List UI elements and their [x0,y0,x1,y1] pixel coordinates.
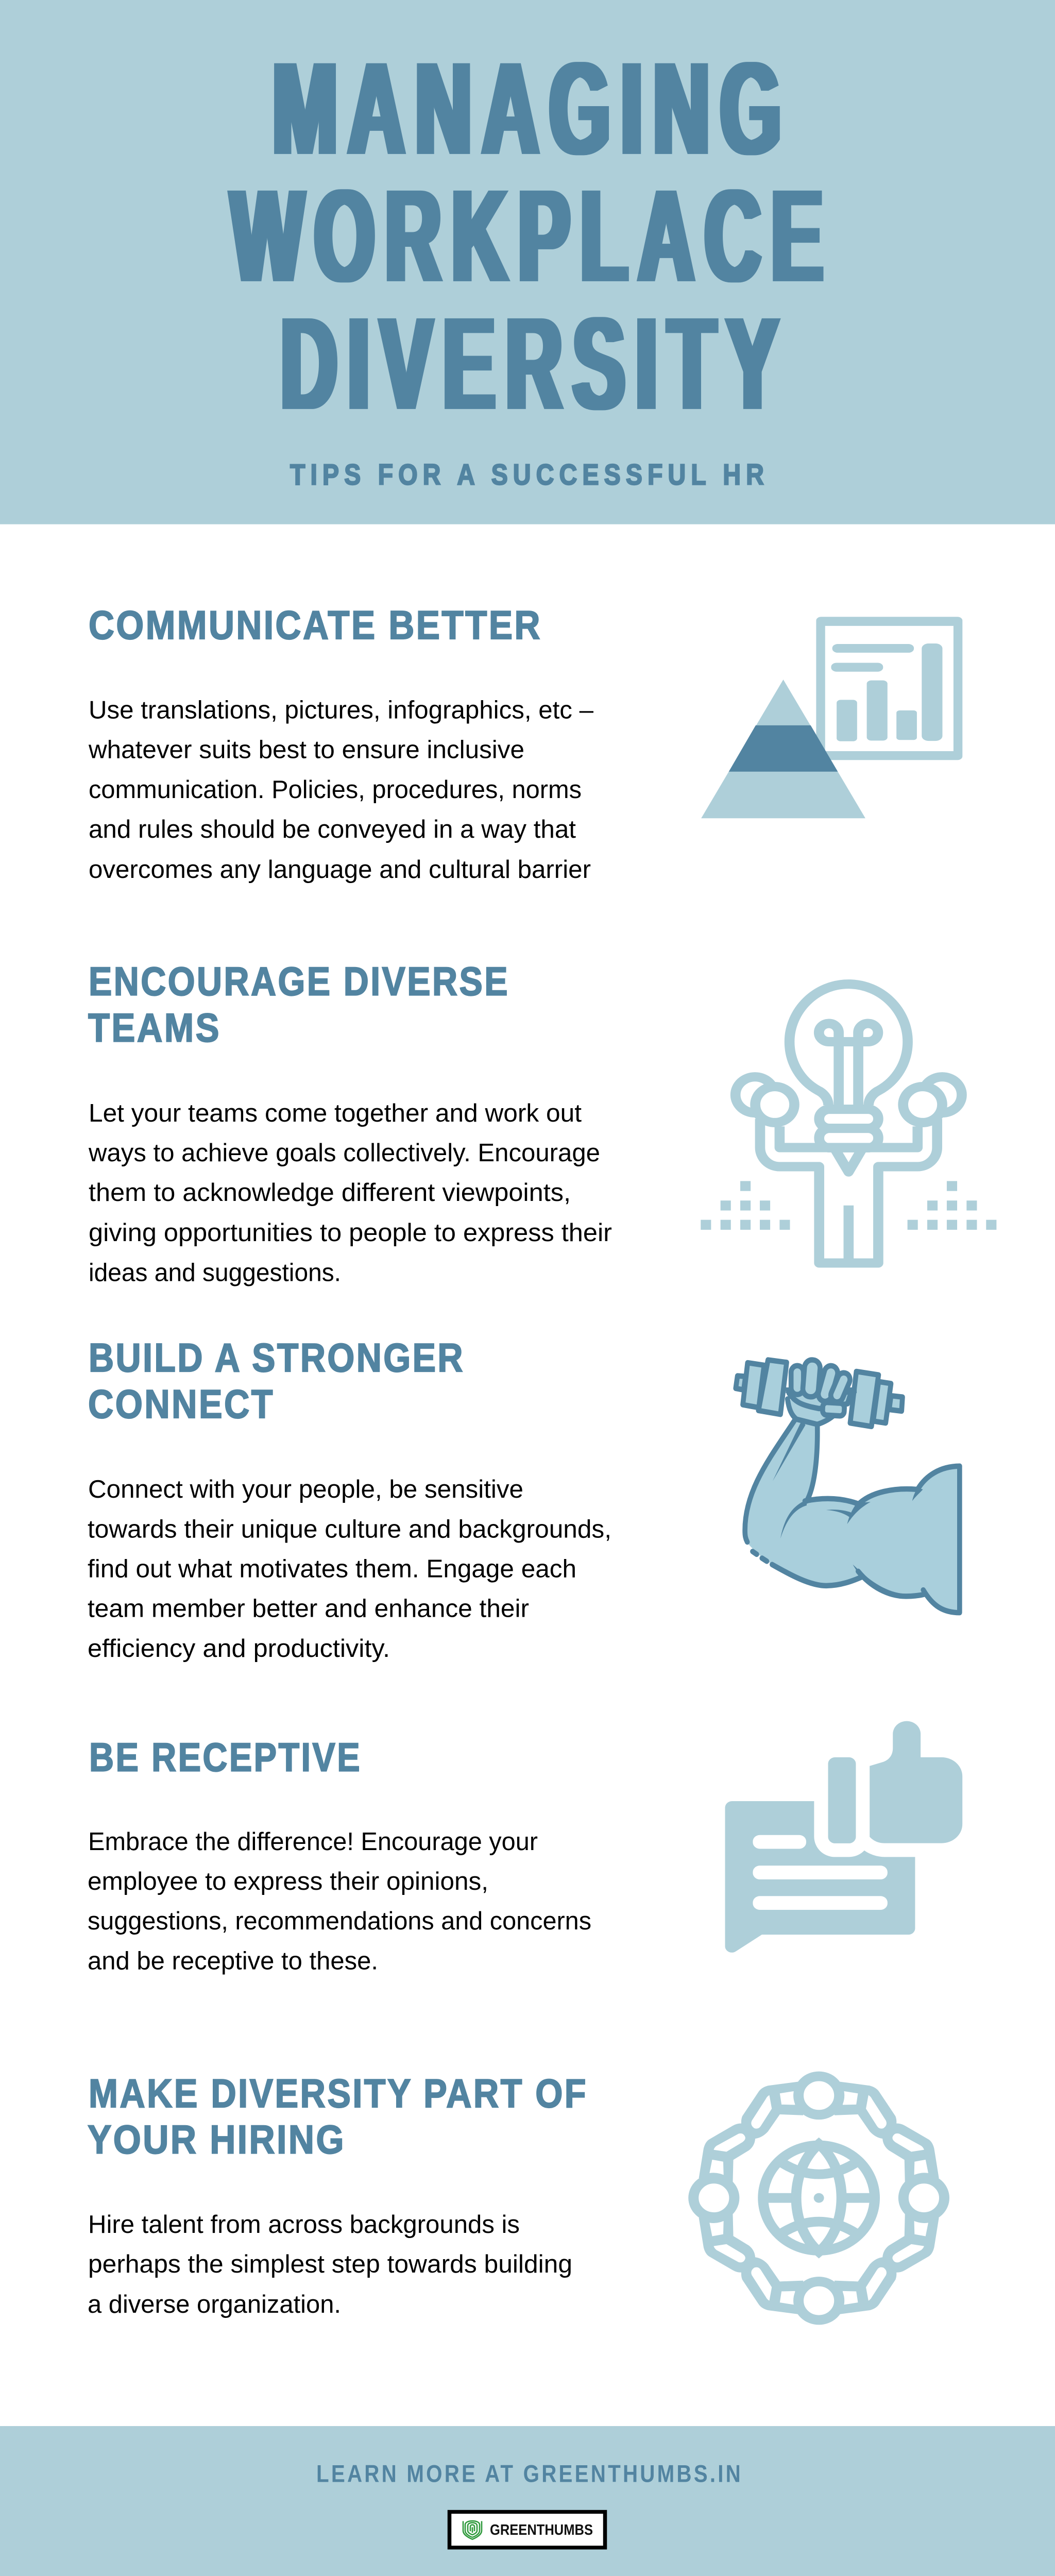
panel: build a stronger connect [88,1335,960,1663]
text block: build a stronger connect: team member better and enhance their [88,1595,529,1623]
text block: make diversity part of your hiring: a diverse organization. [88,2291,341,2318]
panel: communicate better [88,602,962,884]
text block: make diversity part of your hiring: perhaps the simplest step towards building [88,2250,572,2278]
panel: be receptive [88,1721,962,1975]
icon: pyramid and chart report [701,617,962,818]
text block: be receptive: and be receptive to these. [88,1947,378,1975]
icon: flexed arm with dumbbell [733,1357,962,1616]
heading: make diversity part of your hiring: YOUR HIRING [88,2117,346,2162]
text block: be receptive: Embrace the difference! Encourage your [88,1827,538,1856]
text block: encourage diverse teams: them to acknowledge different viewpoints, [89,1179,571,1207]
text block: communicate better: and rules should be conveyed in a way that [89,816,576,843]
text block: make diversity part of your hiring: Hire talent from across backgrounds is [88,2211,520,2239]
heading: communicate better: COMMUNICATE BETTER [89,602,542,648]
icon: globe in chain ring [688,2071,949,2325]
footer link text: LEARN MORE AT GREENTHUMBS.IN [316,2461,743,2487]
text block: encourage diverse teams: giving opportunities to people to express their [89,1219,612,1247]
title [231,35,833,437]
subtitle: TIPS FOR A SUCCESSFUL HR [290,459,769,491]
text block: encourage diverse teams: Let your teams come together and work out [89,1099,582,1127]
heading: be receptive: BE RECEPTIVE [89,1734,362,1780]
heading: build a stronger connect: BUILD A STRONGER [89,1335,465,1380]
text block: encourage diverse teams: ways to achieve goals collectively. Encourage [88,1139,600,1167]
text block: communicate better [88,696,594,884]
footer panel [0,2426,1055,2576]
text block: be receptive [88,1827,591,1975]
heading: encourage diverse teams: ENCOURAGE DIVERSE [89,958,509,1004]
text block: encourage diverse teams [88,1099,612,1286]
text block: build a stronger connect: Connect with your people, be sensitive [88,1476,523,1503]
text block: be receptive: employee to express their opinions, [88,1867,488,1895]
icon: speech bubble and thumbs up [725,1721,962,1953]
text block: make diversity part of your hiring [88,2211,572,2318]
text block: communicate better: overcomes any language and cultural barrier [89,856,591,884]
heading: build a stronger connect [88,1335,465,1427]
heading: build a stronger connect: CONNECT [88,1381,275,1427]
heading: encourage diverse teams [88,958,509,1050]
text block: communicate better: Use translations, pictures, infographics, etc – [89,696,594,724]
text block: encourage diverse teams: ideas and suggestions. [89,1259,341,1286]
logo: greenthumbs [449,2512,605,2548]
icon: fingerprint shield [463,2521,482,2539]
header panel [0,0,1055,524]
text block: be receptive: suggestions, recommendations and concerns [88,1907,591,1935]
logo wordmark: GREENTHUMBS [490,2522,593,2538]
icon: light bulb person [701,979,996,1267]
heading: encourage diverse teams: TEAMS [88,1005,221,1050]
text block: communicate better: whatever suits best to ensure inclusive [88,736,524,764]
heading: make diversity part of your hiring: MAKE DIVERSITY PART OF [89,2071,588,2116]
text block: build a stronger connect: find out what motivates them. Engage each [88,1555,576,1583]
panel: make diversity part of your hiring [88,2071,944,2320]
heading: make diversity part of your hiring [88,2071,588,2162]
text block: communicate better: communication. Policies, procedures, norms [89,775,582,804]
panel: encourage diverse teams [88,958,996,1286]
text block: build a stronger connect: towards their unique culture and backgrounds, [88,1515,611,1543]
text block: build a stronger connect: efficiency and productivity. [88,1634,390,1663]
text block: build a stronger connect [88,1476,611,1663]
